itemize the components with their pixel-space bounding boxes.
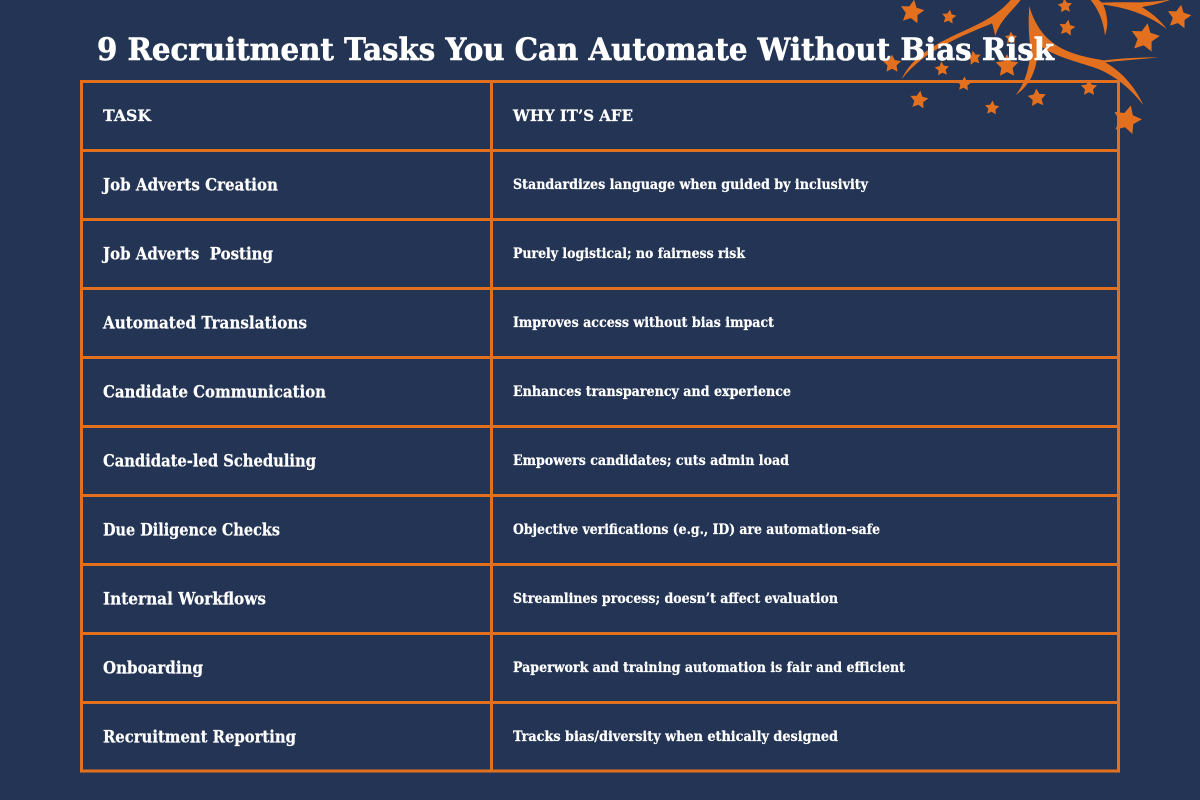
row: candidate-led scheduling: Candidate-led Scheduling [103, 452, 316, 470]
row: job adverts creation: Job Adverts Creation [101, 176, 278, 194]
row: candidate communication: Candidate Communication [103, 382, 326, 402]
row: onboarding [103, 658, 906, 678]
row: job adverts creation: Standardizes language when guided by inclusivity [513, 177, 869, 193]
table grid [82, 82, 1118, 771]
row: job adverts posting [101, 244, 746, 264]
row: candidate communication [103, 382, 791, 402]
row: candidate-led scheduling: Empowers candidates; cuts admin load [513, 453, 790, 469]
title: 9 Recruitment Tasks You Can Automate Without Bias Risk [97, 32, 1055, 68]
row: automated translations [102, 314, 775, 332]
row: candidate communication: Enhances transparency and experience [513, 384, 791, 400]
row: candidate-led scheduling [103, 452, 790, 470]
header: why it's safe: WHY IT’S AFE [512, 106, 633, 125]
stars [883, 0, 1193, 135]
row: internal workflows [103, 590, 838, 608]
row: onboarding: Paperwork and training automation is fair and efficient [513, 660, 906, 676]
row: internal workflows: Streamlines process; doesn’t affect evaluation [513, 591, 838, 607]
row: job adverts posting: Job Adverts Posting [101, 244, 273, 264]
row: onboarding: Onboarding [103, 658, 203, 678]
row: job adverts creation [101, 176, 869, 194]
row: internal workflows: Internal Workflows [103, 590, 266, 608]
decorative corner: orange branches and stars [883, 0, 1193, 135]
row: recruitment reporting: Tracks bias/diversity when ethically designed [513, 729, 839, 745]
branch: left [902, 0, 1021, 79]
row: recruitment reporting: Recruitment Reporting [103, 728, 296, 746]
row: due diligence checks [103, 520, 880, 540]
row: automated translations: Automated Translations [102, 314, 307, 332]
row: due diligence checks: Objective verifications (e.g., ID) are automation-safe [513, 522, 880, 538]
branch: centre [1016, 6, 1158, 105]
row: job adverts posting: Purely logistical; no fairness risk [513, 246, 746, 262]
table header row [103, 106, 633, 125]
branch: right [1091, 0, 1172, 35]
header: task: TASK [103, 106, 152, 125]
row: due diligence checks: Due Diligence Checks [103, 520, 280, 540]
row: automated translations: Improves access without bias impact [513, 315, 775, 331]
row: recruitment reporting [103, 728, 839, 746]
